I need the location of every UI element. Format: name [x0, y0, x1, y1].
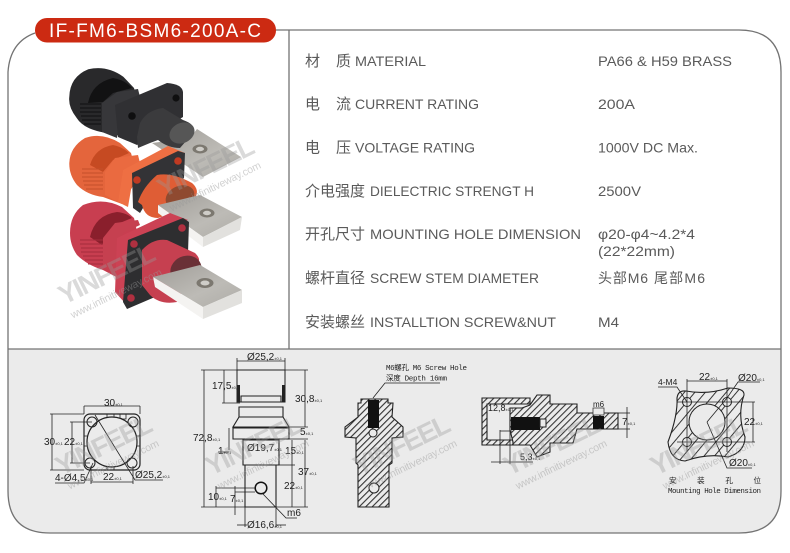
watermarks: www.infinitiveway.com	[660, 437, 756, 493]
row: installation screw: 安装螺丝	[305, 314, 365, 331]
row: dielectric strength	[305, 183, 642, 200]
row: mounting hole dimension: (22*22mm)	[598, 243, 675, 259]
drawing: section view horizontal: m6	[593, 400, 605, 409]
drawing: mounting hole dimension: 4-M4	[658, 377, 678, 387]
spec table	[305, 53, 732, 331]
row: material	[305, 53, 732, 70]
drawing: mounting hole dimension: Mounting Hole Dimension	[668, 488, 761, 496]
watermarks: YINFEEL	[348, 409, 455, 481]
drawing: side view: Ø19,7±0,1	[247, 443, 283, 454]
row: material: 质	[336, 53, 351, 70]
watermarks: YINFEEL	[498, 409, 605, 481]
watermarks: YINFEEL	[152, 131, 259, 203]
row: dielectric strength: DIELECTRIC STRENGT H	[370, 183, 534, 199]
drawing: side view	[193, 352, 323, 531]
drawing: front view: 22±0,1	[103, 472, 123, 483]
drawing: side view: 22±0,1	[284, 481, 304, 492]
row: current rating: 200A	[598, 96, 636, 112]
row: current rating: CURRENT RATING	[355, 96, 479, 112]
drawing: mounting hole dimension: Ø20±0,1	[729, 458, 756, 469]
row: installation screw: INSTALLTION SCREW&NUT	[370, 314, 556, 330]
watermarks	[50, 131, 758, 493]
row: screw stem diameter: 尾部M6	[654, 270, 705, 286]
row: screw stem diameter	[305, 270, 705, 287]
row: mounting hole dimension	[305, 226, 695, 259]
row: voltage rating	[305, 140, 698, 156]
watermarks: YINFEEL	[53, 238, 160, 310]
red connector	[70, 201, 242, 319]
row: screw stem diameter: SCREW STEM DIAMETER	[370, 270, 539, 286]
black connector	[69, 68, 241, 177]
drawing: side view: 72,8±0,1	[193, 433, 221, 444]
drawing: section view horizontal	[482, 395, 636, 464]
drawing: mounting hole dimension: 22±0,1	[744, 417, 764, 428]
drawing: section view horizontal: 7±0,1	[622, 417, 636, 428]
drawing: front view: 22±0,1	[64, 437, 84, 448]
drawing: mounting hole dimension: 22±0,1	[699, 372, 719, 383]
row: dielectric strength: 介电强度	[305, 183, 365, 200]
drawing: side view: Ø25,2±0,1	[247, 352, 283, 363]
drawing: mounting hole dimension: Ø20±0,1	[738, 373, 765, 384]
drawing: side view: Ø16,6±0,1	[247, 520, 283, 531]
drawing: front view	[44, 398, 171, 484]
drawing: side view: 7±0,1	[230, 494, 244, 505]
row: current rating: 流	[336, 96, 351, 113]
row: material: MATERIAL	[355, 53, 426, 69]
row: installation screw	[305, 314, 619, 331]
drawing: side view: 15±0,1	[285, 446, 305, 457]
row: material: PA66 & H59 BRASS	[598, 53, 732, 69]
title badge: IF-FM6-BSM6-200A-C	[49, 21, 261, 42]
watermarks: www.infinitiveway.com	[65, 437, 161, 493]
row: dielectric strength: 2500V	[598, 183, 642, 199]
watermarks: YINFEEL	[200, 409, 307, 481]
drawing: side view: 1±0,1	[218, 446, 232, 457]
watermarks: YINFEEL	[645, 409, 752, 481]
drawing: side view: 30,8±0,1	[295, 394, 323, 405]
row: installation screw: M4	[598, 314, 619, 330]
drawing: front view: 30±0,1	[44, 437, 64, 448]
watermarks: www.infinitiveway.com	[167, 159, 263, 215]
row: voltage rating: VOLTAGE RATING	[355, 140, 475, 156]
row: current rating: 电	[305, 96, 320, 113]
row: screw stem diameter: 螺杆直径	[305, 270, 365, 287]
drawing: side view: 5±0,1	[300, 427, 314, 438]
row: mounting hole dimension: φ20-φ4~4.2*4	[598, 226, 695, 242]
watermarks: www.infinitiveway.com	[363, 437, 459, 493]
drawing: mounting hole dimension: 安 装 孔 位	[669, 475, 762, 486]
drawing: side view: 17,5±0,1	[212, 381, 240, 392]
row: material: 材	[305, 53, 320, 70]
product photo: three connectors	[69, 68, 242, 319]
row: voltage rating: 压	[336, 140, 351, 156]
drawing: side view: 37±0,1	[298, 467, 318, 478]
bottom drawing panel	[8, 349, 781, 533]
row: voltage rating: 1000V DC Max.	[598, 140, 698, 156]
drawing: section view horizontal: 12,8±0,1	[488, 403, 514, 413]
orange connector	[69, 136, 242, 247]
drawing: front view: Ø25,2±0,1	[135, 470, 171, 481]
watermarks: YINFEEL	[50, 409, 157, 481]
drawing: front view: 4-Ø4,5±0,1	[55, 473, 94, 484]
watermarks: www.infinitiveway.com	[215, 437, 311, 493]
drawing: section view horizontal: 5,3±0,1	[520, 452, 541, 462]
row: screw stem diameter: 头部M6	[598, 270, 648, 286]
drawing: section view vertical	[345, 362, 467, 507]
drawing: section view vertical: M6螺孔 M6 Screw Hole	[386, 362, 467, 373]
drawing: mounting hole dimension	[658, 372, 765, 496]
drawing: side view: 10±0,1	[208, 492, 228, 503]
row: mounting hole dimension: 开孔尺寸	[305, 226, 365, 243]
drawing: section view vertical: 深度 Depth 16mm	[386, 372, 447, 384]
drawing: side view: m6	[287, 508, 301, 519]
row: current rating	[305, 96, 636, 113]
watermarks: www.infinitiveway.com	[513, 437, 609, 493]
row: mounting hole dimension: MOUNTING HOLE DIMENSION	[370, 226, 581, 242]
drawing: front view: 30±0,1	[104, 398, 124, 409]
watermarks: www.infinitiveway.com	[68, 266, 164, 322]
row: voltage rating: 电	[305, 140, 320, 156]
